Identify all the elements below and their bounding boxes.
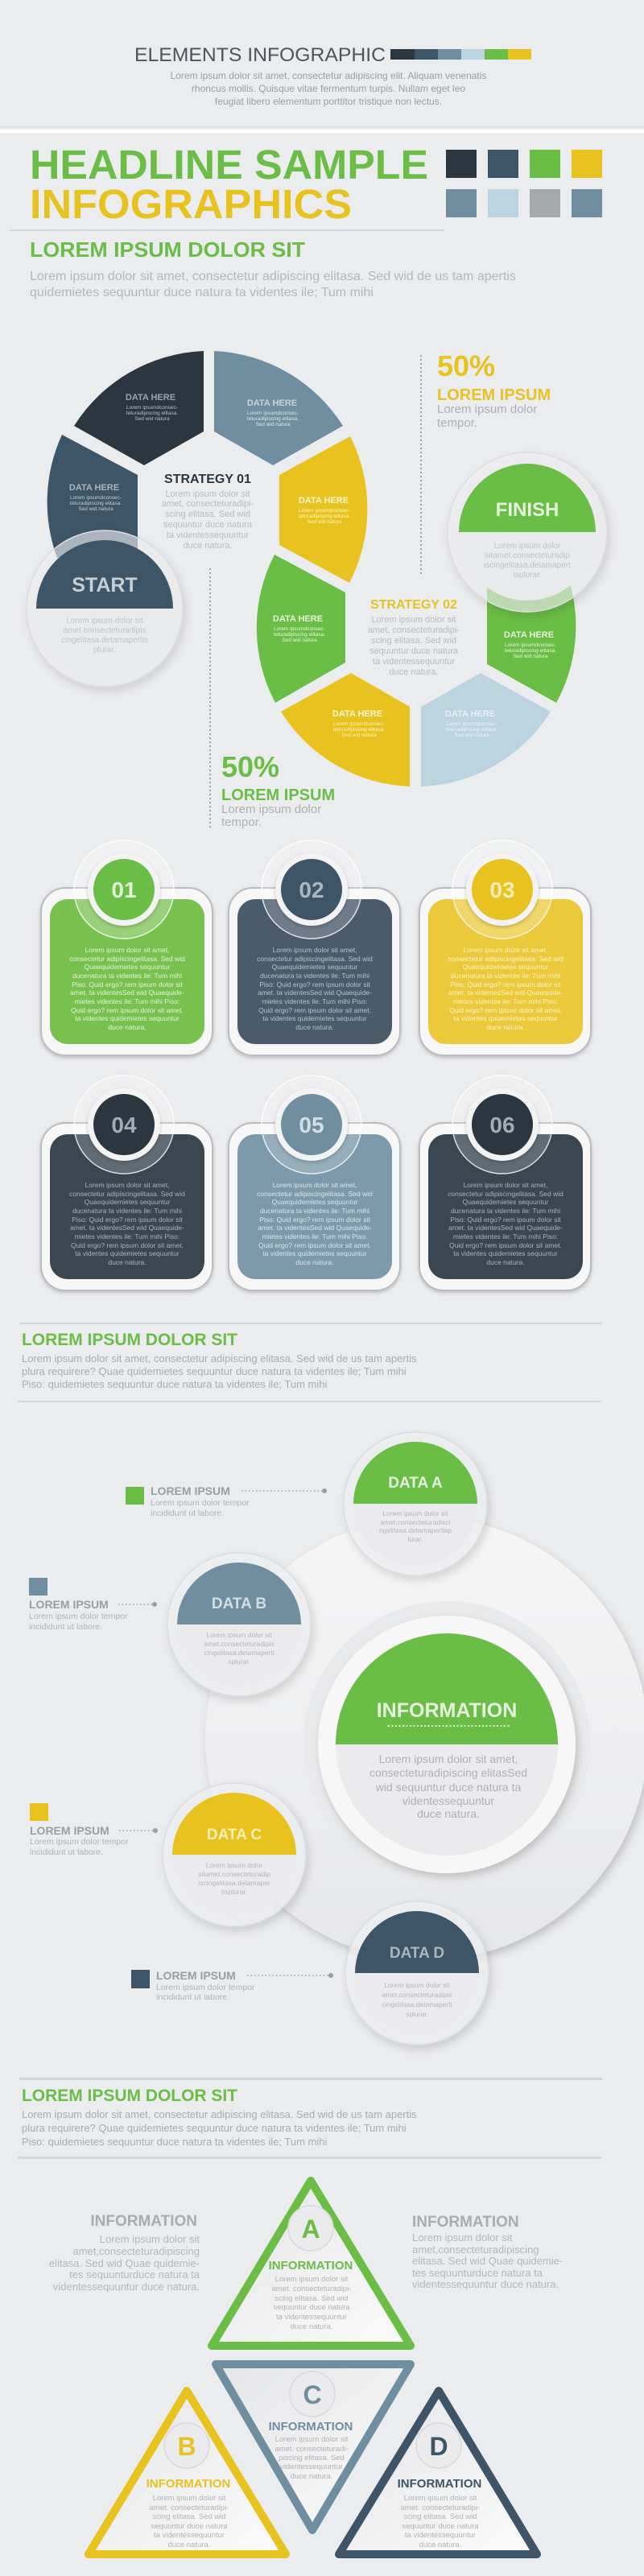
data B circle: splurar. — [228, 1657, 250, 1666]
segment: slate: Sed wid natura — [78, 506, 114, 512]
legend A: incididunt ut labore. — [151, 1509, 224, 1518]
headline: HEADLINE SAMPLE — [30, 142, 428, 188]
data A circle: amet.consecteturadisci — [381, 1518, 451, 1526]
strategy 01 text: duce natura. — [183, 541, 233, 551]
legend D: Lorem ipsum dolor tempor — [156, 1983, 255, 1992]
legend B: LOREM IPSUM — [29, 1598, 109, 1611]
card 03: amet. ta videntesSed wid Quaequide- — [448, 989, 563, 997]
information circle: wid sequuntur duce natura ta — [375, 1781, 521, 1794]
card 01: Piso: Quid ergo? rem ipsum dolor sit — [72, 980, 183, 989]
triangle C: videntessequuntur — [280, 2462, 343, 2471]
data D circle: amet.consecteturadipis — [382, 1991, 452, 1999]
triangle A: ta videntessequuntur — [276, 2313, 347, 2322]
card 01: Lorem ipsum dolor sit amet, — [85, 946, 169, 954]
strategy 01 text: sequuntur duce natura — [163, 520, 253, 530]
card 05: Lorem ipsum dolor sit amet, — [273, 1181, 357, 1189]
strategy 02 text — [368, 598, 460, 677]
section heading 2: Piso: quidemietes sequuntur duce natura ta videntes ile; Tum mihi — [22, 1378, 327, 1390]
triangle A — [212, 2181, 411, 2346]
subtitle text: Lorem ipsum dolor sit amet, consectetur adipiscing elit. Aliquam venenatis — [171, 70, 486, 81]
card 06 — [419, 1075, 591, 1290]
triangle A: scing elitasa. Sed wid — [275, 2294, 349, 2303]
side text right — [412, 2214, 563, 2290]
card 04 — [41, 1075, 213, 1290]
card 04: Quaequidemietes sequuntur — [85, 1198, 171, 1206]
card 04: duce natura. — [108, 1258, 147, 1266]
start circle: START — [72, 574, 138, 597]
section heading 3 — [22, 2087, 417, 2148]
card 04: ducenatura ta videntes ile: Tum mihi — [72, 1207, 182, 1215]
side text right: tes sequunturduce natura ta — [412, 2267, 543, 2279]
numbered cards — [41, 840, 591, 1290]
start circle: amet.consecteturadipis — [64, 626, 146, 635]
segment: light blue: teturadipiscing elitasa. — [446, 727, 497, 733]
card 06: 06 — [489, 1113, 515, 1137]
triangle C: Lorem ipsum dolor sit — [275, 2435, 349, 2444]
side text left: INFORMATION — [90, 2213, 197, 2230]
triangle D: scing elitasa. Sed wid — [403, 2512, 477, 2521]
card 01: duce natura. — [108, 1023, 147, 1031]
triangle B: INFORMATION — [147, 2477, 230, 2491]
card 06: amet. ta videntesSed wid Quaequide- — [448, 1224, 563, 1232]
wheel 1 — [47, 351, 367, 583]
card 03: consectetur adipiscingelitasa. Sed wid — [448, 955, 564, 963]
card 05: mietes videntes ile: Tum mihi Piso: — [262, 1232, 367, 1241]
callout: 50% top: 50% — [437, 349, 495, 382]
information circle: Lorem ipsum dolor sit amet, — [379, 1752, 518, 1765]
card 02 — [229, 840, 400, 1055]
side text left: videntessequuntur duce natura. — [53, 2281, 200, 2293]
data D circle: Lorem ipsum dolor sit — [384, 1981, 450, 1989]
subtitle text: feugiat libero elementum porttitor tristique non lectus. — [215, 96, 442, 107]
legend A — [126, 1484, 327, 1518]
segment: blue-gray — [214, 351, 343, 465]
card 01: mietes videntes ile: Tum mihi Piso: — [75, 997, 180, 1005]
triangle C: duce natura. — [291, 2472, 332, 2481]
information circle — [318, 1616, 576, 1873]
data C circle: tisplurar. — [221, 1888, 247, 1896]
card 05: Quid ergo? rem ipsum dolor sit amet. — [258, 1241, 371, 1249]
triangle D: sequuntur duce natura — [402, 2522, 479, 2531]
segment: yellow: Sed wid natura — [307, 519, 342, 525]
segment: slate — [47, 435, 138, 558]
section heading 2 — [22, 1331, 417, 1390]
finish circle: iscingelitasa.detamapert — [484, 561, 571, 570]
data A circle — [344, 1432, 487, 1575]
triangle B: Lorem ipsum dolor sit — [153, 2494, 226, 2503]
color swatches — [446, 150, 602, 217]
data C circle: sitamet.consecteturadip — [198, 1870, 270, 1878]
segment: light blue: Lorem ipsumdconsec- — [446, 721, 497, 727]
callout: 50% top: LOREM IPSUM — [437, 386, 551, 404]
segment: yellow bottom: Lorem ipsumdconsec- — [333, 721, 385, 727]
card 04: amet. ta videntesSed wid Quaequide- — [70, 1224, 184, 1232]
side text left — [49, 2213, 200, 2293]
data A circle: Lorem ipsum dolor sit — [382, 1509, 448, 1517]
callout: 50% top: Lorem ipsum dolor — [437, 402, 537, 416]
triangle D: ta videntessequuntur — [405, 2531, 476, 2540]
triangle A: INFORMATION — [269, 2259, 353, 2273]
side text left: tes sequunturduce natura ta — [69, 2268, 200, 2281]
triangle B: duce natura. — [168, 2541, 210, 2549]
strategy 02 text: Lorem ipsum dolor sit — [371, 615, 456, 625]
section heading 3: LOREM IPSUM DOLOR SIT — [22, 2087, 237, 2105]
section heading 2: Lorem ipsum dolor sit amet, consectetur adipiscing elitasa. Sed wid de us tam apertis — [22, 1352, 417, 1364]
strategy 02 text: STRATEGY 02 — [370, 598, 457, 612]
card 03: Quid ergo? rem ipsum dolor sit amet. — [449, 1006, 562, 1014]
color bar — [390, 49, 531, 60]
triangle A: A — [301, 2215, 320, 2244]
triangle D: D — [429, 2432, 448, 2461]
triangle C: INFORMATION — [269, 2420, 353, 2434]
side text left: Lorem ipsum dolor sit — [100, 2233, 200, 2245]
segment: green left: Sed wid natura — [282, 638, 317, 643]
side text right: videntessequuntur duce natura. — [412, 2278, 559, 2290]
intro paragraph: Lorem ipsum dolor sit amet, consectetur adipiscing elitasa. Sed wid de us tam apertis — [30, 270, 516, 283]
finish circle: Lorem ipsum dolor — [494, 542, 561, 551]
card 01: Quaequidemietes sequuntur — [85, 963, 171, 971]
segment: slate: teturadipiscing elitasa. — [70, 501, 122, 506]
data B circle: amet.consecteturadipis — [204, 1640, 275, 1648]
segment: blue-gray: teturadipiscing elitasa. — [247, 416, 299, 422]
triangle B: scing elitasa. Sed wid — [152, 2512, 226, 2521]
card 02: ta videntes quidemietes sequuntur — [262, 1014, 367, 1022]
legend C: LOREM IPSUM — [30, 1824, 109, 1837]
callout: 50% bottom: 50% — [221, 750, 279, 783]
section heading 3: plura requirere? Quae quidemietes sequuntur duce natura ta videntes ile; Tum mihi — [22, 2122, 407, 2134]
card 05 — [229, 1075, 400, 1290]
triangle C: amet. consecteturadi- — [275, 2445, 349, 2454]
card 05: 05 — [299, 1113, 324, 1137]
triangle B: sequuntur duce natura — [151, 2522, 228, 2531]
card 04: 04 — [111, 1113, 137, 1137]
start circle: plurar. — [93, 646, 116, 654]
card 02: ducenatura ta videntes ile: Tum mihi — [260, 972, 369, 980]
information circle: duce natura. — [417, 1807, 480, 1820]
strategy 02 text: scing elitasa. Sed wid — [371, 636, 456, 646]
card 03: mietes videntes ile: Tum mihi Piso: — [453, 997, 558, 1005]
segment: dark: teturadipiscing elitasa. — [126, 411, 178, 416]
callout: 50% bottom: LOREM IPSUM — [221, 786, 335, 804]
data C circle: iscingelitasa.detamaper — [198, 1879, 270, 1887]
segment: yellow — [279, 436, 367, 583]
card 01 — [41, 840, 213, 1055]
legend D: LOREM IPSUM — [156, 1969, 236, 1982]
legend B — [29, 1578, 157, 1632]
triangle C: C — [303, 2380, 322, 2409]
data A circle: lurar. — [408, 1535, 423, 1543]
subtitle text — [171, 70, 486, 107]
headline: INFOGRAPHICS — [30, 181, 352, 227]
segment: green right — [487, 586, 576, 703]
intro paragraph — [30, 270, 516, 299]
card 02: Piso: Quid ergo? rem ipsum dolor sit — [259, 980, 370, 989]
information circle: consecteturadipiscing elitasSed — [369, 1766, 527, 1779]
segment: green left: Lorem ipsumdconsec- — [274, 626, 325, 632]
card 06: Lorem ipsum dolor sit amet, — [464, 1181, 547, 1189]
triangle A: amet. consecteturadipi- — [272, 2285, 351, 2293]
header: elements infographic — [134, 44, 531, 107]
card 05: duce natura. — [295, 1258, 334, 1266]
segment: green right: Lorem ipsumdconsec- — [505, 642, 556, 648]
card 06: Quaequidemietes sequuntur — [463, 1198, 549, 1206]
segment: green right: teturadipiscing elitasa. — [505, 648, 556, 654]
side text right: Lorem ipsum dolor sit — [412, 2231, 513, 2244]
start circle: cingelitasa.detamapertis — [61, 636, 148, 645]
finish circle — [448, 452, 607, 612]
section heading 1: LOREM IPSUM DOLOR SIT — [30, 237, 305, 262]
data B circle — [167, 1553, 311, 1696]
callout: 50% top — [421, 349, 551, 576]
strategy 02 text: sequuntur duce natura — [369, 646, 459, 656]
headline — [30, 142, 428, 227]
card 03: Piso: Quid ergo? rem ipsum dolor sit — [450, 980, 561, 989]
segment: blue-gray: Sed wid natura — [255, 422, 291, 427]
title: ELEMENTS INFOGRAPHIC — [134, 44, 386, 66]
subtitle text: rhoncus mollis. Quisque vitae fermentum turpis. Nullam eget leo — [192, 83, 465, 94]
card 03: Lorem ipsum dolor sit amet, — [464, 946, 547, 954]
card 05: Quaequidemietes sequuntur — [272, 1198, 358, 1206]
card 05: amet. ta videntesSed wid Quaequide- — [258, 1224, 372, 1232]
legend A: LOREM IPSUM — [151, 1484, 230, 1497]
card 04: mietes videntes ile: Tum mihi Piso: — [75, 1232, 180, 1241]
card 06: consectetur adipiscingelitasa. Sed wid — [448, 1190, 564, 1198]
triangle D — [339, 2391, 537, 2554]
legend C: incididunt ut labore. — [30, 1847, 103, 1857]
finish circle: isplurar. — [513, 571, 542, 580]
card 05: Piso: Quid ergo? rem ipsum dolor sit — [259, 1216, 370, 1224]
callout: 50% top: tempor. — [437, 416, 477, 430]
data B circle: DATA B — [212, 1596, 266, 1612]
strategy 01 text: amet, consecteturadipi- — [162, 499, 254, 509]
data B circle: Lorem ipsum dolor sit — [206, 1631, 272, 1639]
segment: yellow bottom: teturadipiscing elitasa. — [333, 727, 385, 733]
card 06: mietes videntes ile: Tum mihi Piso: — [453, 1232, 558, 1241]
triangle B: amet. consecteturadipi- — [150, 2504, 229, 2512]
card 02: amet. ta videntesSed wid Quaequide- — [258, 989, 372, 997]
segment: yellow bottom: Sed wid natura — [341, 733, 377, 738]
legend C — [30, 1803, 158, 1857]
card 03: duce natura. — [486, 1023, 525, 1031]
data A circle: ngelitasa.detamapertisp — [379, 1526, 452, 1534]
card 01: ta videntes quidemietes sequuntur — [75, 1014, 180, 1022]
data D circle — [345, 1901, 489, 2045]
data C circle: DATA C — [207, 1827, 262, 1843]
card 06: ducenatura ta videntes ile: Tum mihi — [451, 1207, 560, 1215]
card 01: Quid ergo? rem ipsum dolor sit amet. — [71, 1006, 184, 1014]
segment: green right: Sed wid natura — [513, 654, 548, 659]
segment: blue-gray: DATA HERE — [247, 398, 297, 408]
start circle: Lorem ipsum dolor sit — [66, 617, 143, 625]
wheel 2 — [257, 555, 576, 786]
section heading 2: LOREM IPSUM DOLOR SIT — [22, 1331, 237, 1349]
card 02: Quaequidemietes sequuntur — [272, 963, 358, 971]
card 03: Quaequidemietes sequuntur — [463, 963, 549, 971]
card 04: Lorem ipsum dolor sit amet, — [85, 1181, 169, 1189]
card 01: amet. ta videntesSed wid Quaequide- — [70, 989, 184, 997]
triangle D: INFORMATION — [398, 2477, 481, 2491]
card 03: ta videntes quidemietes sequuntur — [453, 1014, 558, 1022]
side text left: elitasa. Sed wid Quae quidemie- — [49, 2257, 200, 2269]
card 02: 02 — [299, 877, 324, 902]
card 01: 01 — [111, 877, 137, 902]
card 03 — [419, 840, 591, 1055]
triangle D: amet. consecteturadipi- — [401, 2504, 480, 2512]
card 02: mietes videntes ile: Tum mihi Piso: — [262, 997, 367, 1005]
segment: dark: DATA HERE — [126, 393, 175, 402]
triangle C — [216, 2364, 411, 2530]
card 01: ducenatura ta videntes ile: Tum mihi — [72, 972, 182, 980]
strategy 02 text: duce natura. — [389, 667, 439, 677]
data B circle: cingelitasa.detamaperti — [204, 1649, 275, 1657]
data D circle: cingelitasa.detamaperti — [382, 2000, 452, 2008]
strategy 01 text: scing elitasa. Sed wid — [165, 510, 250, 519]
card 06: Quid ergo? rem ipsum dolor sit amet. — [449, 1241, 562, 1249]
side text right: amet,consecteturadipiscing — [412, 2244, 539, 2256]
data C circle — [163, 1783, 306, 1926]
card 05: ducenatura ta videntes ile: Tum mihi — [260, 1207, 369, 1215]
card 02: Quid ergo? rem ipsum dolor sit amet. — [258, 1006, 371, 1014]
data C circle: Lorem ipsum dolor — [206, 1861, 262, 1869]
side text right: elitasa. Sed wid Quae quidemie- — [412, 2255, 563, 2267]
segment: light blue: DATA HERE — [445, 709, 495, 719]
card 06: ta videntes quidemietes sequuntur — [453, 1249, 558, 1257]
strategy 01 text: ta videntessequuntur — [167, 530, 249, 540]
strategy 02 text: amet, consecteturadipi- — [368, 625, 460, 635]
segment: dark: Lorem ipsumdconsec- — [126, 405, 178, 411]
segment: yellow: teturadipiscing elitasa. — [299, 514, 350, 519]
triangle C: piscing elitasa. Sed — [279, 2454, 345, 2462]
card 05: consectetur adipiscingelitasa. Sed wid — [257, 1190, 373, 1198]
card 03: ducenatura ta videntes ile: Tum mihi — [451, 972, 560, 980]
start circle — [27, 530, 183, 687]
big background ring — [205, 1517, 644, 1960]
segment: light blue — [421, 673, 551, 786]
segment: blue-gray: Lorem ipsumdconsec- — [247, 411, 299, 416]
segment: slate: DATA HERE — [69, 483, 119, 493]
segment: dark: Sed wid natura — [134, 416, 170, 422]
legend B: incididunt ut labore. — [29, 1622, 102, 1632]
intro paragraph: quidemietes sequuntur duce natura ta videntes ile; Tum mihi — [30, 286, 374, 299]
card 04: Quid ergo? rem ipsum dolor sit amet. — [71, 1241, 184, 1249]
segment: dark — [74, 351, 204, 465]
card 01: consectetur adipiscingelitasa. Sed wid — [69, 955, 185, 963]
segment: yellow: Lorem ipsumdconsec- — [299, 508, 350, 514]
section heading 2: plura requirere? Quae quidemietes sequuntur duce natura ta videntes ile; Tum mihi — [22, 1365, 407, 1377]
legend A: Lorem ipsum dolor tempor — [151, 1498, 250, 1508]
segment: light blue: Sed wid natura — [454, 733, 489, 738]
section heading 3: Piso: quidemietes sequuntur duce natura ta videntes ile; Tum mihi — [22, 2136, 327, 2148]
strategy 01 text — [162, 473, 254, 551]
callout: 50% bottom: Lorem ipsum dolor — [221, 803, 321, 816]
segment: yellow bottom: DATA HERE — [332, 709, 382, 719]
information circle: videntessequuntur — [402, 1794, 495, 1807]
side text right: INFORMATION — [412, 2214, 519, 2231]
card 04: Piso: Quid ergo? rem ipsum dolor sit — [72, 1216, 183, 1224]
card 02: Lorem ipsum dolor sit amet, — [273, 946, 357, 954]
card 03: 03 — [489, 877, 515, 902]
data A circle: DATA A — [388, 1475, 443, 1492]
legend D: incididunt ut labore. — [156, 1992, 229, 2002]
triangle B: ta videntessequuntur — [154, 2531, 225, 2540]
callout: 50% bottom — [210, 568, 335, 829]
finish circle: FINISH — [496, 499, 559, 521]
data D circle: DATA D — [390, 1945, 444, 1962]
card 02: consectetur adipiscingelitasa. Sed wid — [257, 955, 373, 963]
card 04: ta videntes quidemietes sequuntur — [75, 1249, 180, 1257]
finish circle: sitamet.consecteturadip — [485, 551, 570, 560]
segment: yellow: DATA HERE — [299, 496, 349, 506]
triangle A: duce natura. — [291, 2322, 332, 2331]
strategy 01 text: STRATEGY 01 — [164, 473, 251, 486]
callout: 50% bottom: tempor. — [221, 815, 262, 829]
segment: green left — [257, 555, 345, 703]
triangle D: duce natura. — [419, 2541, 461, 2549]
segment: green right: DATA HERE — [504, 630, 554, 640]
legend D — [131, 1969, 333, 2002]
triangle A: sequuntur duce natura — [273, 2303, 350, 2312]
triangle A: Lorem ipsum dolor sit — [275, 2275, 349, 2284]
segment: yellow bottom — [281, 673, 410, 786]
triangle D: Lorem ipsum dolor sit — [404, 2494, 477, 2503]
segment: green left: DATA HERE — [273, 614, 323, 624]
segment: slate: Lorem ipsumdconsec- — [70, 495, 122, 501]
card 05: ta videntes quidemietes sequuntur — [262, 1249, 367, 1257]
information circle: INFORMATION — [377, 1699, 517, 1722]
triangle B — [89, 2391, 286, 2554]
legend B: Lorem ipsum dolor tempor — [29, 1612, 128, 1621]
card 02: duce natura. — [295, 1023, 334, 1031]
segment: green left: teturadipiscing elitasa. — [274, 632, 325, 638]
section heading 3: Lorem ipsum dolor sit amet, consectetur adipiscing elitasa. Sed wid de us tam apertis — [22, 2108, 417, 2120]
side text left: amet,consecteturadipiscing — [72, 2245, 200, 2257]
card 04: consectetur adipiscingelitasa. Sed wid — [69, 1190, 185, 1198]
card 06: Piso: Quid ergo? rem ipsum dolor sit — [450, 1216, 561, 1224]
card 06: duce natura. — [486, 1258, 525, 1266]
strategy 02 text: ta videntessequuntur — [373, 657, 455, 667]
triangle B: B — [177, 2432, 196, 2461]
legend C: Lorem ipsum dolor tempor — [30, 1837, 129, 1847]
data D circle: splurar. — [406, 2010, 428, 2018]
strategy 01 text: Lorem ipsum dolor sit — [165, 489, 250, 499]
